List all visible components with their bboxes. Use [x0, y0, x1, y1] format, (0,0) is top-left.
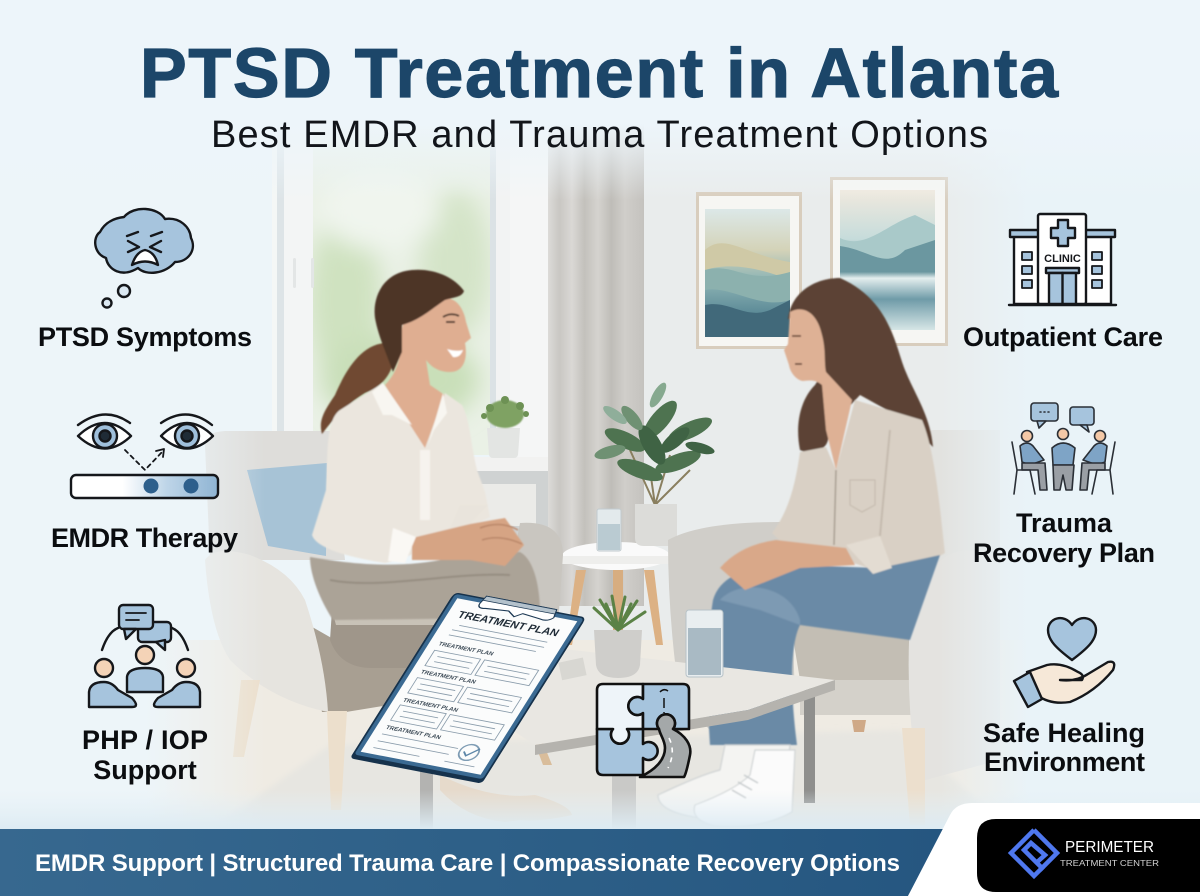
chair legs	[327, 711, 347, 810]
small plant on sill	[481, 396, 529, 458]
window	[272, 110, 550, 541]
icon: puzzle with road	[597, 684, 690, 777]
face and neck	[784, 309, 852, 470]
banner bar	[0, 829, 945, 896]
label: PTSD Symptoms	[38, 322, 252, 352]
white tab	[908, 803, 1200, 896]
item: Safe Healing Environment	[983, 618, 1145, 777]
label: PHP / IOP	[82, 725, 208, 755]
logo text: PERIMETER	[1065, 839, 1154, 856]
clipboard: treatment plan: TREATMENT PLAN	[384, 725, 442, 741]
curtain	[548, 110, 644, 606]
icon: heart in open hand	[1014, 618, 1114, 707]
heels	[440, 775, 572, 822]
label: Trauma	[1016, 508, 1113, 538]
painting left	[696, 192, 802, 349]
title	[140, 34, 1059, 156]
fingers	[480, 524, 522, 544]
icon: distressed thought cloud	[95, 209, 193, 308]
hands	[720, 540, 855, 590]
rug	[210, 730, 1010, 830]
side table	[562, 542, 670, 645]
clipboard: treatment plan	[350, 590, 588, 784]
item: Trauma Recovery Plan: Recovery Plan	[973, 538, 1155, 568]
black badge	[977, 819, 1200, 892]
clipboard: treatment plan: TREATMENT PLAN	[419, 670, 477, 685]
woman left: smiling therapist	[310, 270, 540, 620]
forearm and hands	[412, 518, 524, 566]
potted plant on side table	[593, 380, 716, 546]
clipboard: treatment plan: TREATMENT PLAN	[455, 610, 561, 639]
sneakers	[658, 745, 790, 820]
left armchair	[205, 431, 563, 810]
icon: clinic building	[1009, 214, 1116, 305]
item: Outpatient Care	[963, 214, 1163, 352]
coffee table	[420, 648, 835, 832]
glass on coffee table	[686, 610, 723, 677]
right armchair	[668, 430, 1000, 825]
blouse	[772, 400, 945, 578]
back hair	[788, 278, 933, 452]
main heading: PTSD Treatment in Atlanta	[140, 34, 1059, 112]
woman right: client	[658, 278, 945, 827]
label: Outpatient Care	[963, 322, 1163, 352]
small plant on coffee table	[594, 596, 645, 678]
chair lower front	[300, 620, 430, 712]
glass on side table	[597, 509, 621, 551]
chair outer arm	[205, 551, 328, 712]
painting right	[830, 177, 948, 346]
banner	[0, 829, 945, 896]
icon: clinic building: CLINIC	[1044, 253, 1081, 265]
ponytail	[321, 343, 393, 434]
item: Safe Healing Environment: Environment	[984, 747, 1145, 777]
logo panel	[908, 803, 1200, 896]
clipboard: treatment plan: TREATMENT PLAN	[437, 642, 494, 657]
subtitle: Best EMDR and Trauma Treatment Options	[211, 114, 988, 156]
blouse	[312, 383, 490, 563]
cuff	[846, 536, 892, 574]
sleeve cuff	[388, 528, 416, 563]
fades	[0, 100, 265, 840]
icon: seated group talking	[1012, 403, 1115, 494]
label: Safe Healing	[983, 718, 1145, 748]
icon: eyes and bilateral bar	[71, 414, 218, 498]
item: Trauma Recovery Plan	[973, 403, 1155, 568]
logo mark	[1011, 830, 1057, 876]
seat cushion	[330, 610, 455, 668]
jeans	[708, 555, 940, 745]
item: PHP / IOP Support	[82, 605, 208, 785]
clipboard: treatment plan: TREATMENT PLAN	[401, 698, 459, 714]
smile	[447, 349, 463, 357]
floor	[130, 640, 1170, 840]
pants	[310, 552, 540, 620]
hair	[375, 270, 464, 372]
item: PHP / IOP Support: Support	[93, 755, 197, 785]
logo panel: TREATMENT CENTER	[1060, 858, 1159, 868]
item: EMDR Therapy	[51, 414, 238, 553]
wall	[500, 110, 1200, 650]
item: PTSD Symptoms	[38, 209, 252, 352]
neck and face	[385, 298, 471, 452]
icon: group talk	[89, 605, 200, 707]
banner text: EMDR Support | Structured Trauma Care | Compassionate Recovery Options	[35, 850, 900, 877]
label: EMDR Therapy	[51, 523, 238, 553]
